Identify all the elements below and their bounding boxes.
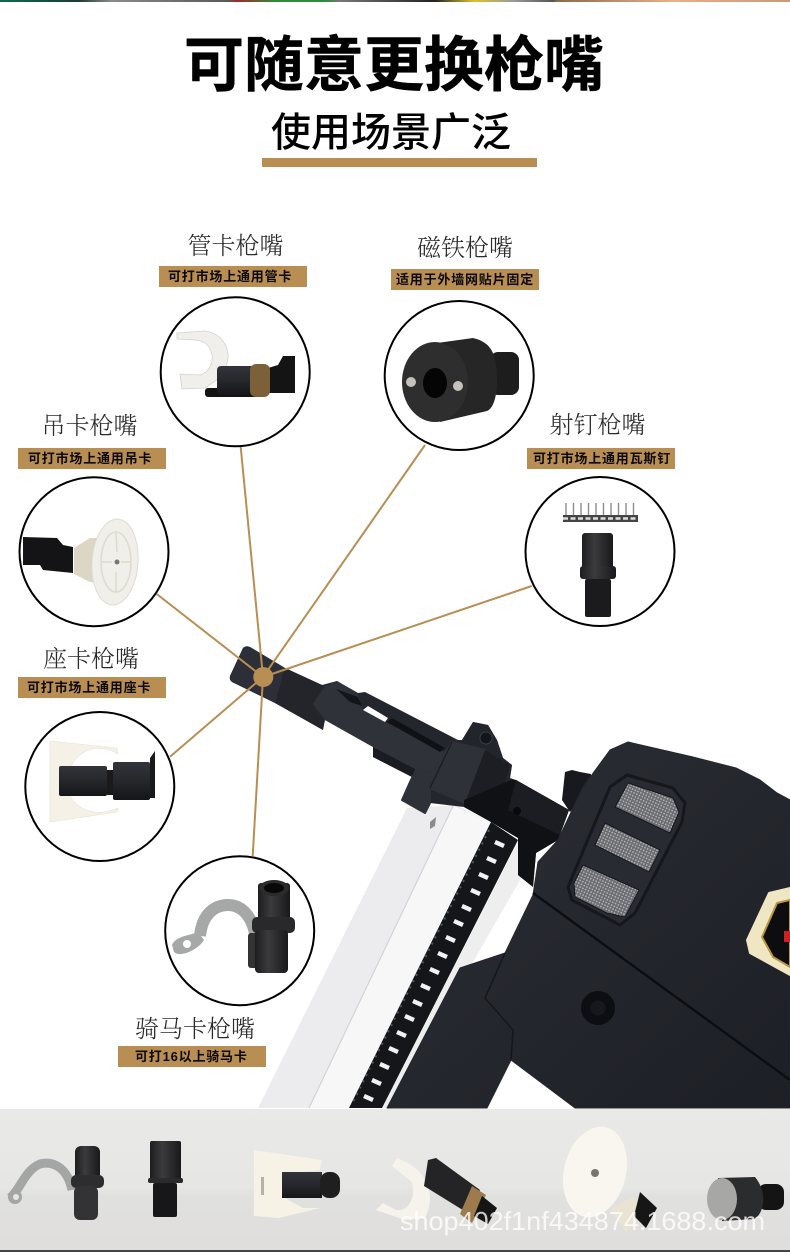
callout: 吊卡枪嘴: 吊卡枪嘴: [42, 413, 138, 440]
grip seam: [485, 953, 513, 1060]
leader lines: [157, 445, 532, 856]
callout: 管卡枪嘴: [159, 233, 310, 446]
callout: 座卡枪嘴: 座卡枪嘴: [43, 646, 139, 673]
product: seat clip: [254, 1150, 340, 1218]
back knob: [562, 770, 591, 812]
top colour strip: [0, 0, 790, 2]
icon: hanger nozzle: [23, 518, 141, 606]
callout: 射钉枪嘴: [526, 412, 675, 626]
nail gun: [230, 646, 790, 1108]
barrel plate: [313, 681, 445, 778]
icon: seat clip nozzle: [50, 741, 155, 822]
body seam: [533, 893, 790, 1080]
callout: 座卡枪嘴: [18, 646, 174, 861]
callout: 吊卡枪嘴: 可打市场上通用吊卡: [28, 451, 152, 466]
icon: saddle clip nozzle: [172, 880, 295, 973]
nail chain: [349, 822, 518, 1108]
nozzle shaft: [275, 668, 323, 730]
subtitle: 使用场景广泛: [271, 111, 511, 155]
watermark: shop402f1nf434874.1688.com: [400, 1206, 765, 1236]
callout: 骑马卡枪嘴: 可打16以上骑马卡: [135, 1049, 248, 1064]
callout: 磁铁枪嘴: 适用于外墙网贴片固定: [396, 272, 534, 287]
product: magnet nozzle: [707, 1177, 784, 1221]
hub dot: [253, 667, 273, 687]
callout: 磁铁枪嘴: 磁铁枪嘴: [417, 235, 513, 262]
icon: pipe clip nozzle: [177, 331, 295, 397]
callout: 吊卡枪嘴: [18, 413, 168, 626]
product: hanger disc: [554, 1120, 657, 1232]
callout: 磁铁枪嘴: [385, 235, 539, 450]
callout: 管卡枪嘴: 可打市场上通用管卡: [168, 269, 292, 284]
product: pipe clip: [376, 1158, 497, 1224]
callout: 管卡枪嘴: 管卡枪嘴: [188, 233, 284, 260]
title: 可随意更换枪嘴: [184, 32, 604, 99]
callout: 射钉枪嘴: 射钉枪嘴: [550, 412, 646, 439]
gold underline: [262, 158, 537, 167]
magazine rails: [258, 805, 527, 1108]
gold badge: [747, 888, 790, 975]
callout: 骑马卡枪嘴: 骑马卡枪嘴: [135, 1016, 255, 1043]
barrel and nozzle silhouette: [230, 646, 569, 887]
icon: magnet nozzle: [402, 338, 519, 422]
callout: 骑马卡枪嘴: [118, 856, 314, 1067]
tool body: [387, 742, 790, 1108]
icon: fastener row: [563, 503, 638, 522]
callout: 射钉枪嘴: 可打市场上通用瓦斯钉: [533, 451, 671, 466]
nozzle tip: [230, 647, 285, 703]
icon: shot nozzle: [580, 533, 616, 617]
vent panel: [568, 775, 685, 925]
bottom product strip: [0, 1109, 790, 1252]
receiver between block and body: [464, 780, 569, 887]
clamp block: [402, 722, 512, 813]
product: shot nozzle: [148, 1141, 183, 1217]
product: saddle clip: [8, 1146, 104, 1220]
callout: 座卡枪嘴: 可打市场上通用座卡: [27, 680, 151, 695]
screw: [581, 991, 615, 1025]
